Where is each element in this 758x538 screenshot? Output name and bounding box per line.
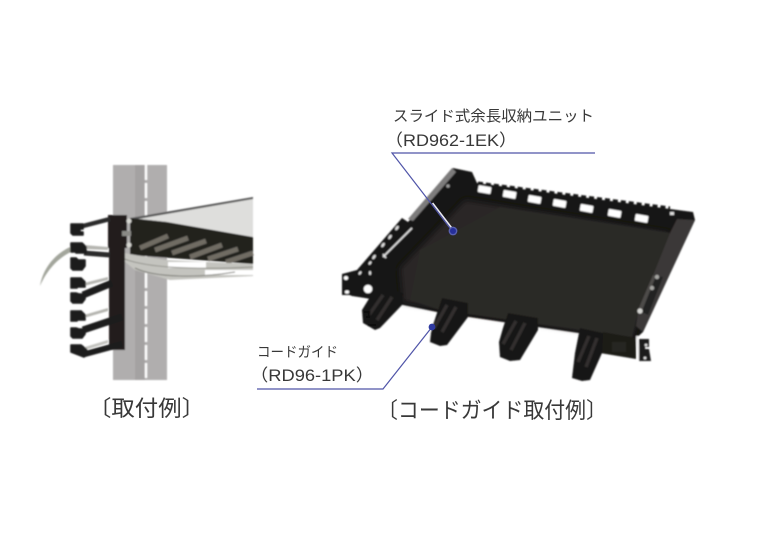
right mounting box and ear bbox=[600, 332, 651, 361]
rear wall crenellations bbox=[478, 183, 670, 208]
cord guide 4 bbox=[572, 328, 603, 381]
caption: cord guide mounting example: 〔コードガイド取付例〕 bbox=[377, 398, 607, 423]
right wall bbox=[636, 219, 695, 332]
caption: mounting example: 〔取付例〕 bbox=[88, 396, 205, 421]
small hole on left wall bbox=[446, 184, 450, 188]
photo: slide-type slack storage tray with cord guides bbox=[342, 168, 695, 381]
label: cord guide bbox=[250, 344, 374, 385]
label: slack storage unit bbox=[385, 108, 594, 150]
rear wall slots bbox=[478, 185, 674, 223]
label: cord guide: （RD96-1PK） bbox=[250, 366, 374, 385]
bundled cables bbox=[112, 251, 253, 280]
label: slack storage unit: （RD962-1EK） bbox=[385, 131, 517, 150]
label: slack storage unit: スライド式余長収納ユニット bbox=[393, 108, 594, 125]
leader line: cord guide bbox=[257, 324, 435, 389]
loose cable bundle bbox=[40, 247, 71, 286]
tray seen from the side bbox=[130, 197, 253, 264]
left mounting ear bbox=[342, 274, 372, 295]
left wall highlight bbox=[408, 168, 456, 221]
cord guide 2 bbox=[430, 298, 468, 346]
cable guide bracket bbox=[108, 215, 132, 350]
photo: rack mounting example bbox=[40, 165, 253, 380]
label: cord guide: コードガイド bbox=[257, 344, 338, 360]
guide fingers bbox=[71, 219, 122, 357]
rack column bbox=[113, 165, 167, 380]
tray silhouette bbox=[342, 168, 695, 341]
left wall vents bbox=[358, 225, 412, 275]
leader line: slack storage unit bbox=[392, 153, 595, 235]
cord guide 3 bbox=[499, 313, 538, 361]
tray floor bbox=[400, 200, 670, 338]
right side rail with screws bbox=[637, 275, 663, 315]
cord guide 1 bbox=[362, 288, 403, 330]
